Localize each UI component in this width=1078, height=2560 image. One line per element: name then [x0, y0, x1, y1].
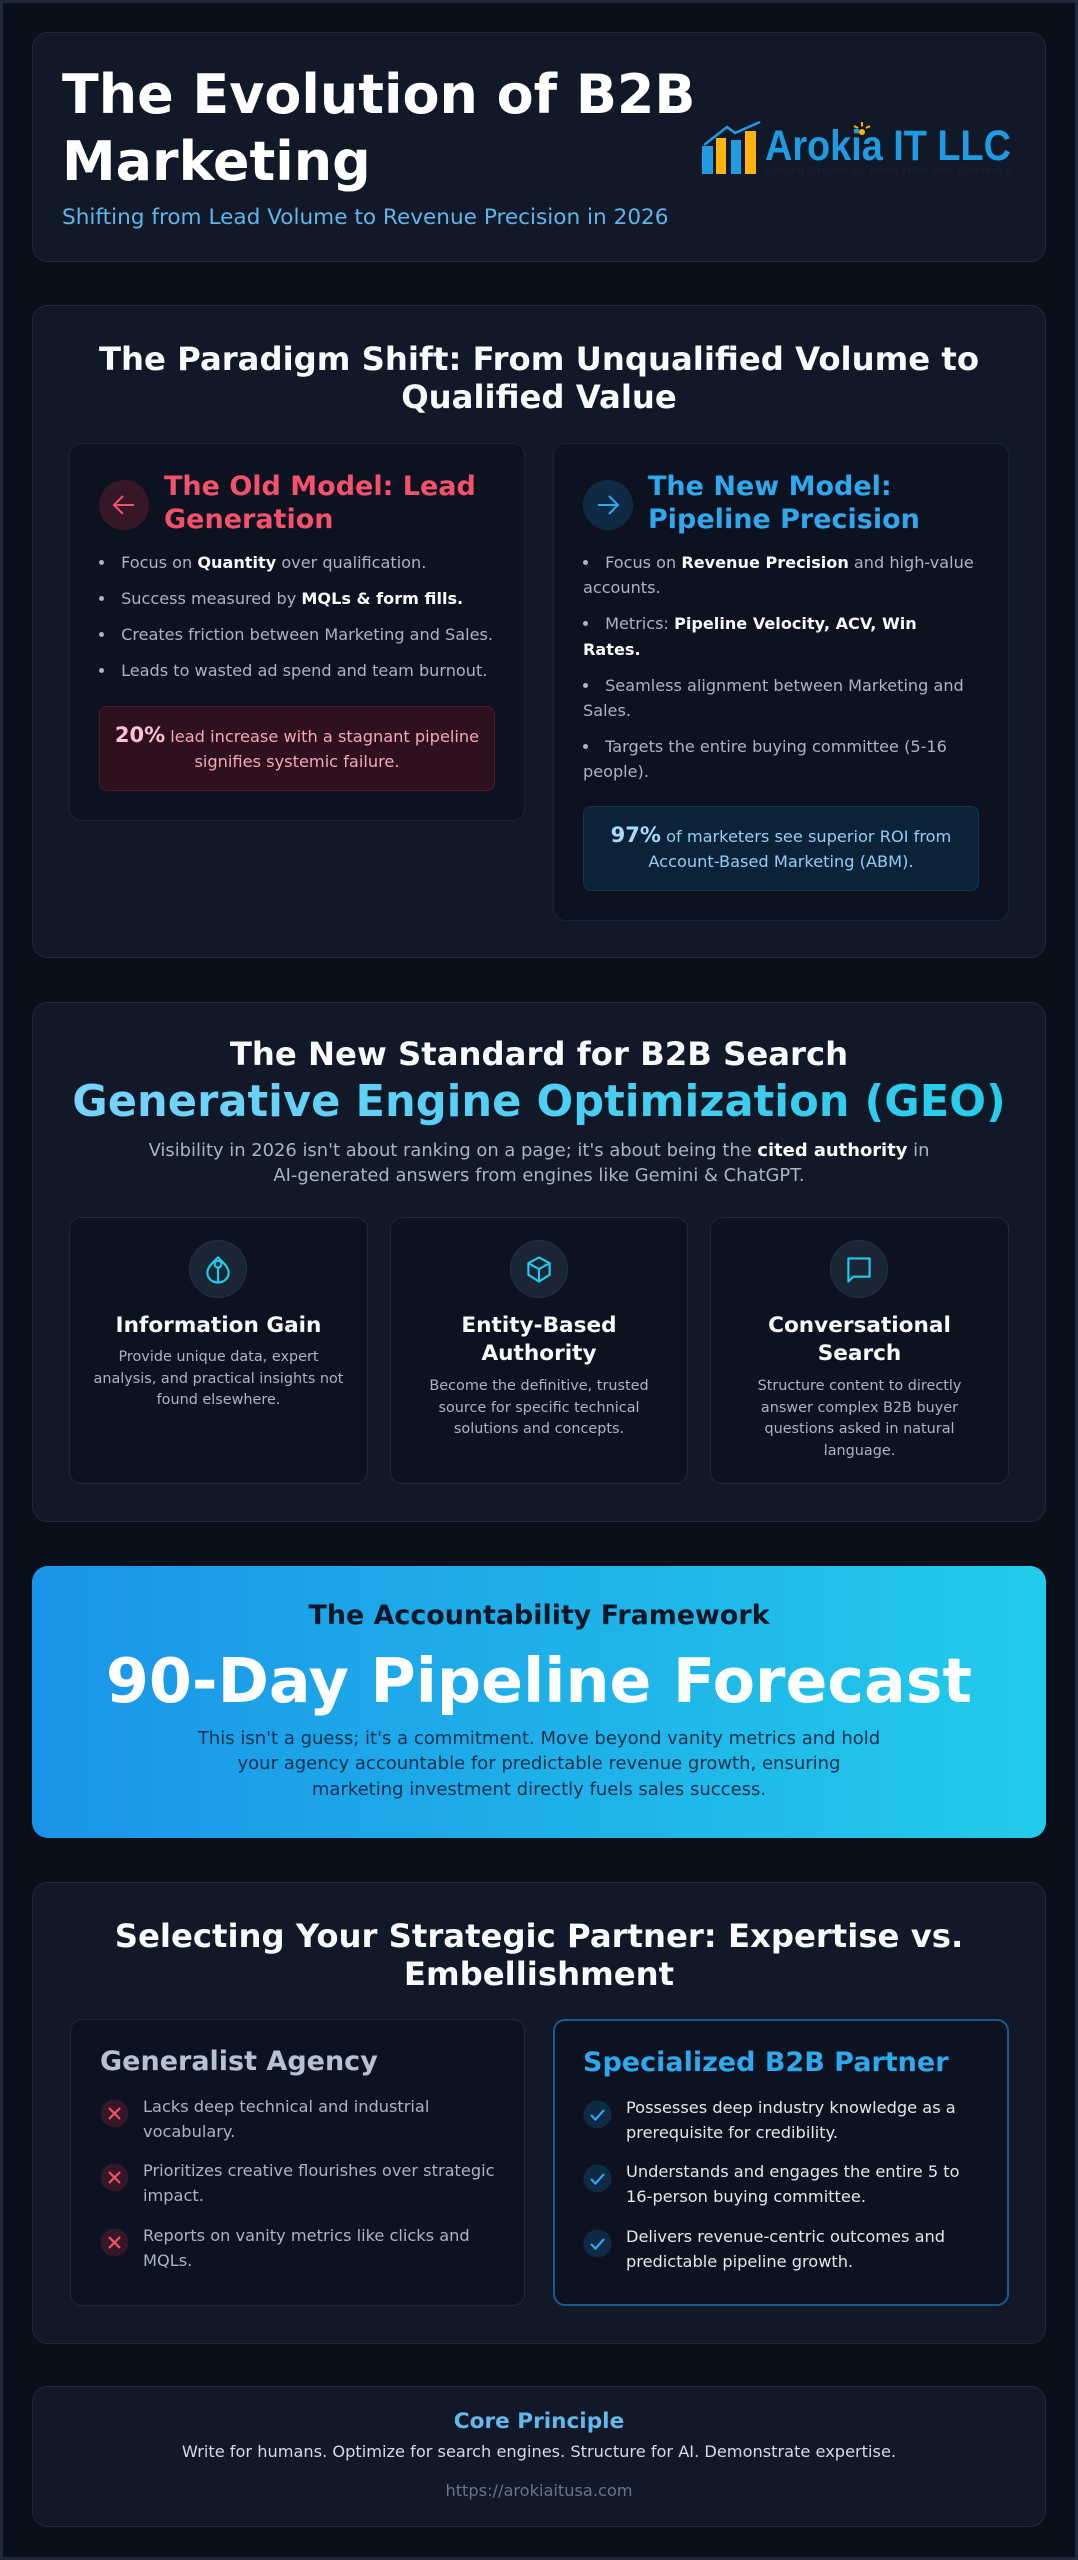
card title: Conversational Search	[768, 1312, 951, 1366]
title	[62, 63, 696, 193]
core principle text: Write for humans. Optimize for search engines. Structure for AI. Demonstrate expertise.	[182, 2442, 896, 2461]
card text: Become the definitive, trusted source for specific technical solutions and concepts.	[429, 1378, 649, 1437]
panel: old model	[69, 443, 525, 821]
GEO description: AI-generated answers from engines like Gemini & ChatGPT.	[273, 1165, 805, 1186]
card: entity-based authority	[390, 1217, 688, 1484]
old model heading: The Old Model: Lead	[164, 471, 476, 502]
subtitle: Shifting from Lead Volume to Revenue Precision in 2026	[62, 204, 669, 230]
logo: Arokia IT LLC: Driving Growth by Innovation and Efficiency	[765, 165, 1012, 177]
generalist heading: Generalist Agency	[100, 2046, 378, 2077]
new model list: Rates.	[583, 640, 641, 659]
new model list: Targets the entire buying committee (5-16 people).	[583, 737, 947, 781]
new model list: Focus on Revenue Precision and high-value accounts.	[583, 553, 974, 597]
new model heading	[648, 471, 920, 535]
card text: Structure content to directly answer complex B2B buyer questions asked in natural language.	[758, 1378, 961, 1459]
new model list: Seamless alignment between Marketing and Sales.	[583, 676, 964, 720]
panel: header	[32, 32, 1046, 262]
panel: new model	[553, 443, 1009, 921]
GEO description: Visibility in 2026 isn't about ranking on a page; it's about being the cited authority in	[149, 1140, 929, 1161]
GEO title: Generative Engine Optimization (GEO)	[72, 1077, 1006, 1127]
GEO description	[148, 1140, 929, 1186]
old model list: Creates friction between Marketing and Sales.	[121, 625, 493, 644]
description: your agency accountable for predictable revenue growth, ensuring	[238, 1753, 840, 1774]
specialized heading: Specialized B2B Partner	[583, 2047, 949, 2078]
icon: arrow right	[583, 480, 633, 530]
description: This isn't a guess; it's a commitment. Move beyond vanity metrics and hold	[198, 1728, 880, 1749]
item: Prioritizes creative flourishes over strategic impact.	[143, 2161, 494, 2205]
panel: footer	[32, 2386, 1046, 2527]
item: Understands and engages the entire 5 to 16-person buying committee.	[626, 2162, 960, 2206]
new model heading: Pipeline Precision	[648, 504, 920, 535]
heading: The Paradigm Shift: From Unqualified Volume to Qualified Value	[99, 340, 979, 416]
panel: specialized partner	[553, 2019, 1009, 2306]
logo: Arokia IT LLC	[702, 120, 1012, 177]
icon: cube	[510, 1240, 568, 1298]
url: https://arokiaitusa.com	[445, 2481, 633, 2500]
stat callout: 97%	[583, 806, 979, 891]
icon: gem	[189, 1240, 247, 1298]
card: conversational search	[710, 1217, 1009, 1484]
description	[198, 1728, 880, 1800]
main heading: 90-Day Pipeline Forecast	[106, 1645, 972, 1717]
old model list: Focus on Quantity over qualification.	[121, 553, 426, 572]
icon: speech bubble	[830, 1240, 888, 1298]
old model heading: Generation	[164, 504, 333, 535]
card title: Entity-Based Authority	[461, 1312, 617, 1366]
description: marketing investment directly fuels sales success.	[312, 1779, 766, 1800]
icon: arrow left	[99, 480, 149, 530]
old model heading	[164, 471, 476, 535]
panel: paradigm shift	[32, 305, 1046, 958]
core principle heading: Core Principle	[454, 2408, 624, 2434]
new model list	[583, 553, 974, 781]
stat callout: 97%: 97% of marketers see superior ROI from Account-Based Marketing (ABM).	[611, 822, 951, 871]
new model list: Metrics: Pipeline Velocity, ACV, Win	[605, 614, 917, 633]
card title: Information Gain	[116, 1312, 321, 1338]
item: Delivers revenue-centric outcomes and predictable pipeline growth.	[626, 2227, 945, 2271]
item: Reports on vanity metrics like clicks and MQLs.	[143, 2226, 470, 2270]
item: Possesses deep industry knowledge as a prerequisite for credibility.	[626, 2098, 956, 2142]
stat callout: 20%	[99, 706, 495, 791]
panel: generalist agency	[70, 2019, 525, 2306]
old model list: Success measured by MQLs & form fills.	[121, 589, 463, 608]
card text: Provide unique data, expert analysis, and practical insights not found elsewhere.	[94, 1349, 343, 1408]
panel: strategic partner	[32, 1882, 1046, 2344]
panel: accountability framework	[32, 1566, 1046, 1838]
panel: GEO	[32, 1002, 1046, 1522]
old model list: Leads to wasted ad spend and team burnout.	[121, 661, 487, 680]
card: information gain	[69, 1217, 368, 1484]
heading: The New Standard for B2B Search	[230, 1035, 848, 1073]
title: Marketing	[62, 130, 371, 193]
old model list	[99, 553, 493, 680]
item: Lacks deep technical and industrial vocabulary.	[143, 2096, 429, 2141]
new model heading: The New Model:	[648, 471, 892, 502]
title: The Evolution of B2B	[62, 63, 696, 126]
heading: Selecting Your Strategic Partner: Expertise vs. Embellishment	[115, 1917, 963, 1993]
eyebrow heading: The Accountability Framework	[309, 1600, 769, 1631]
stat callout: 20%: 20% lead increase with a stagnant pipeline signifies systemic failure.	[115, 722, 479, 771]
